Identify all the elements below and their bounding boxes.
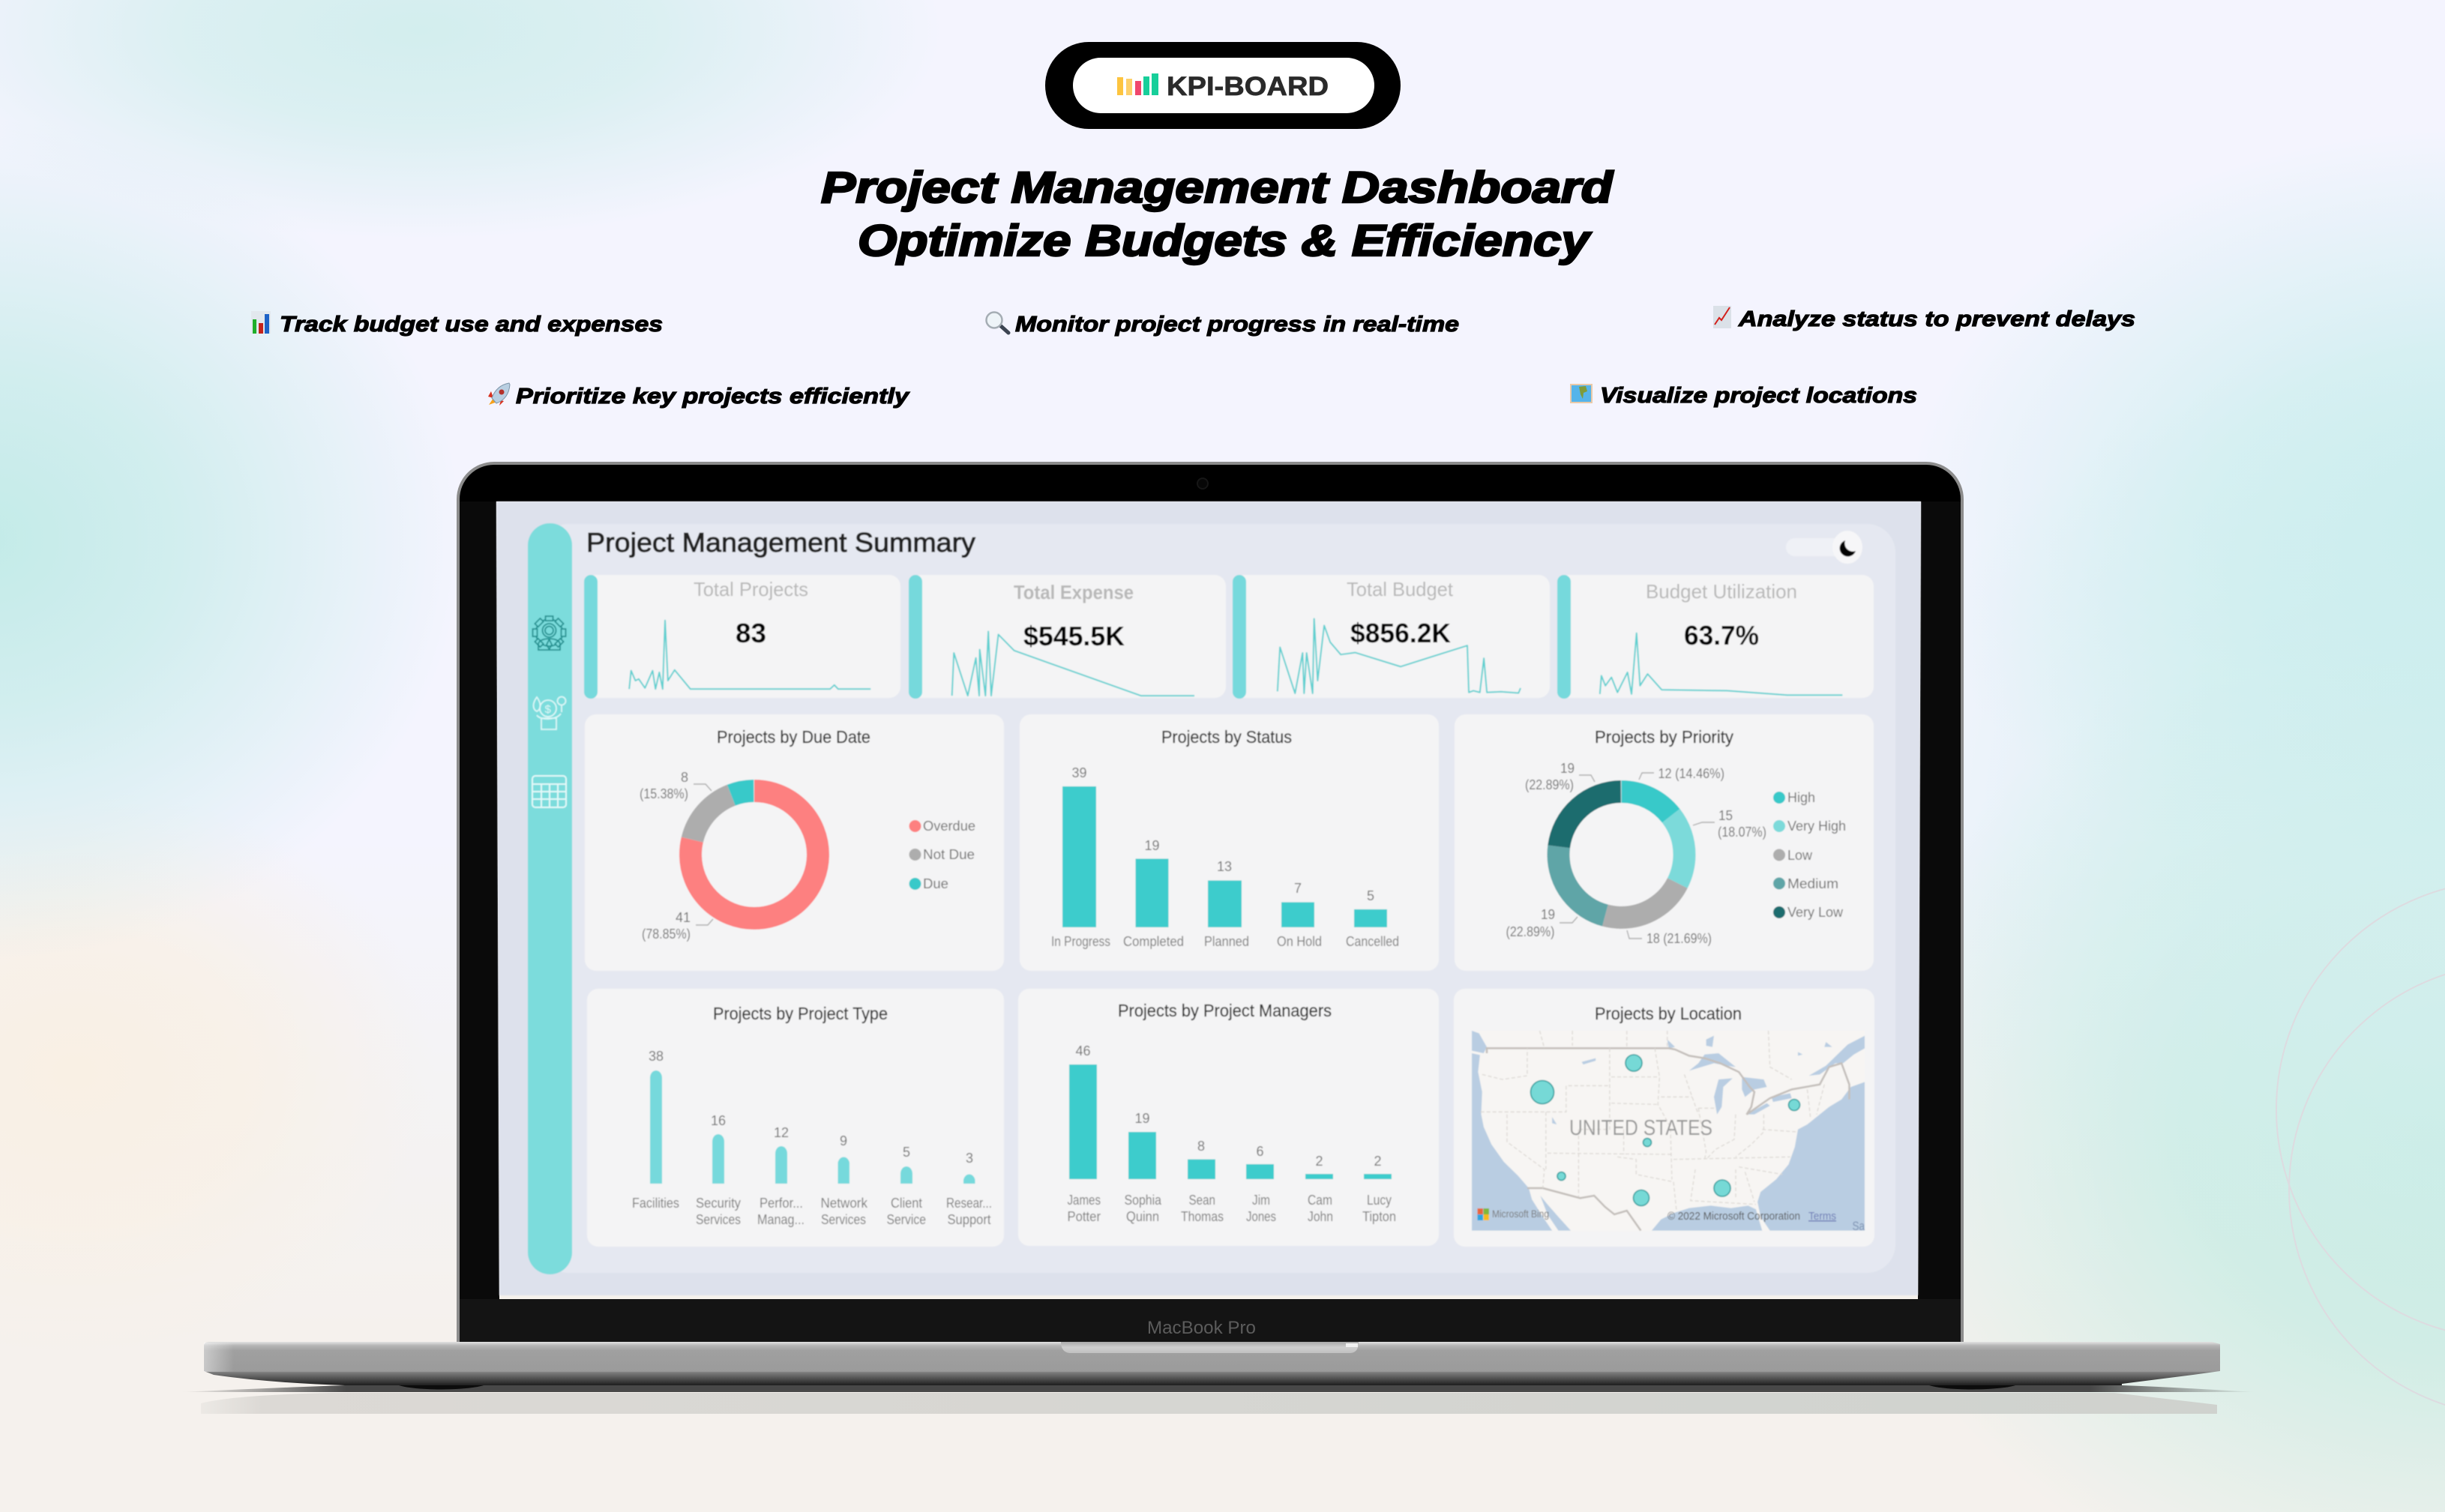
data labels: (22.89%) [1525, 777, 1574, 792]
icon: logo bars [1117, 73, 1158, 95]
category labels: Service [886, 1212, 926, 1227]
category labels: Cam [1308, 1193, 1332, 1208]
KPI card: total expense [909, 575, 1226, 699]
values [649, 1049, 973, 1166]
sparkline [1600, 633, 1842, 695]
heading: Projects by Status [1161, 727, 1292, 747]
panel: projects by status [1020, 714, 1439, 971]
legend: Overdue [923, 819, 975, 834]
feet [395, 1384, 2019, 1390]
legend: Very High [1787, 819, 1846, 834]
data labels [1506, 761, 1766, 946]
values: 38 [649, 1049, 664, 1064]
map attribution: Microsoft Bing [1492, 1208, 1549, 1220]
panel: projects by due date [585, 714, 1004, 971]
category labels: Facilities [632, 1196, 679, 1211]
icon: money tree [534, 697, 565, 729]
panel: projects by project type [587, 989, 1004, 1247]
bar chart [650, 1070, 975, 1184]
legend: High [1787, 790, 1815, 805]
icon: bar chart emoji [251, 311, 271, 334]
logo wordmark: KPI-BOARD [1167, 72, 1329, 101]
map label: UNITED STATES [1569, 1116, 1712, 1140]
bar chart [1069, 1064, 1392, 1179]
decorative circle outlines [2276, 881, 2445, 1416]
category labels [1068, 1193, 1396, 1224]
icon: trend chart emoji [1713, 306, 1731, 328]
location bubbles [1531, 1055, 1799, 1205]
map attribution: © 2022 Microsoft Corporation [1667, 1210, 1800, 1223]
values: 12 [774, 1125, 789, 1140]
heading: Projects by Due Date [717, 727, 870, 747]
legend [1773, 790, 1846, 920]
KPI card: total expense: $545.5K [1023, 621, 1125, 651]
category labels: Thomas [1181, 1209, 1224, 1224]
legend: Due [923, 876, 948, 891]
KPI card: total budget [1233, 575, 1550, 699]
values: 13 [1217, 859, 1232, 874]
KPI card: total projects: Total Projects [694, 578, 808, 600]
icon: money tree: $ [544, 703, 552, 716]
category labels: Jim [1252, 1193, 1270, 1208]
values: 5 [1367, 888, 1374, 903]
values: 9 [840, 1133, 847, 1148]
bullet: track budget: Track budget use and expenses [280, 313, 663, 337]
sparkline [952, 631, 1194, 696]
dashboard inner panel [540, 524, 1895, 1273]
panel: projects by location [1454, 989, 1874, 1247]
values: 5 [903, 1145, 910, 1160]
category labels: Security [696, 1196, 741, 1211]
category labels: Cancelled [1346, 934, 1399, 949]
map geography [1472, 1031, 1865, 1231]
badge: KPI-BOARD logo [1045, 42, 1401, 129]
category labels: Sophia [1125, 1193, 1162, 1208]
data labels: 19 [1541, 907, 1555, 922]
reflection under laptop [201, 1393, 2217, 1414]
legend: Medium [1787, 876, 1838, 891]
camera [1197, 478, 1208, 489]
map [1472, 1031, 1865, 1233]
data labels: (15.38%) [640, 786, 688, 801]
category labels: Manag... [757, 1212, 805, 1227]
values: 2 [1374, 1154, 1382, 1169]
category labels: Client [891, 1196, 922, 1211]
values: 19 [1144, 838, 1160, 853]
KPI card: total budget: $856.2K [1350, 618, 1451, 648]
category labels [1051, 934, 1399, 949]
icon: moon [1840, 540, 1856, 556]
legend: Very Low [1787, 905, 1844, 920]
values: 46 [1075, 1043, 1091, 1058]
donut chart [691, 791, 818, 918]
category labels: Perfor... [760, 1196, 803, 1211]
heading: Projects by Project Managers [1118, 1001, 1332, 1020]
panel: projects by priority [1455, 714, 1874, 971]
data labels [640, 770, 713, 942]
category labels: Tipton [1362, 1209, 1396, 1224]
values: 39 [1071, 765, 1087, 780]
data labels: (18.07%) [1718, 825, 1766, 840]
icon: magnifier emoji [987, 312, 1008, 333]
legend [909, 819, 975, 891]
KPI card: budget utilization: 63.7% [1684, 620, 1759, 651]
map attribution: Terms [1808, 1210, 1836, 1223]
donut chart [1558, 792, 1684, 918]
category labels: In Progress [1051, 934, 1110, 949]
bullet: visualize locations: Visualize project locations [1600, 384, 1917, 408]
data labels: 41 [676, 910, 691, 925]
category labels: John [1308, 1209, 1333, 1224]
icon: rocket emoji [488, 383, 510, 406]
panel: projects by project managers [1018, 989, 1439, 1246]
values: 16 [711, 1113, 726, 1128]
category labels: Sean [1189, 1193, 1215, 1208]
brand label: MacBook Pro [1147, 1318, 1256, 1338]
data labels: 8 [681, 770, 688, 785]
data labels: 19 [1560, 761, 1575, 776]
values: 3 [966, 1151, 973, 1166]
laptop [180, 462, 2257, 1414]
legend: Not Due [923, 847, 975, 862]
map attribution [1477, 1208, 1865, 1231]
legend: Low [1787, 848, 1813, 863]
values [1075, 1043, 1382, 1169]
map attribution: Sa [1852, 1219, 1865, 1233]
values: 7 [1294, 881, 1302, 896]
values: 19 [1134, 1111, 1150, 1126]
base [204, 1342, 2220, 1385]
category labels: Network [820, 1196, 868, 1211]
data labels: (22.89%) [1506, 924, 1555, 939]
dashboard title: Project Management Summary [586, 527, 975, 558]
category labels: Potter [1068, 1209, 1101, 1224]
icon: table [532, 776, 566, 807]
category labels [632, 1196, 992, 1227]
heading: Projects by Priority [1595, 727, 1733, 747]
category labels: Support [948, 1212, 991, 1227]
dashboard screen [496, 502, 1921, 1295]
values: 2 [1315, 1154, 1323, 1169]
category labels: Jones [1246, 1209, 1276, 1224]
title: Optimize Budgets & Efficiency [858, 217, 1592, 265]
bullet: prioritize projects: Prioritize key projects efficiently [516, 385, 910, 409]
KPI card: budget utilization [1557, 575, 1874, 699]
category labels: Services [821, 1212, 866, 1227]
values [1071, 765, 1374, 903]
heading: Projects by Project Type [713, 1004, 888, 1023]
category labels: On Hold [1277, 934, 1322, 949]
KPI card: total expense: Total Expense [1014, 581, 1134, 603]
category labels: James [1068, 1193, 1101, 1208]
category labels: Planned [1204, 934, 1249, 949]
category labels: Completed [1123, 934, 1184, 949]
data labels: (78.85%) [642, 927, 691, 942]
sparkline [1278, 618, 1521, 693]
data labels: 15 [1718, 808, 1733, 823]
data labels: 18 (21.69%) [1646, 931, 1712, 946]
dashboard background [496, 502, 1921, 1295]
heading: Projects by Location [1595, 1004, 1742, 1023]
values: 6 [1256, 1144, 1264, 1159]
KPI card: budget utilization: Budget Utilization [1646, 580, 1797, 603]
lid [457, 462, 1964, 1342]
dark mode toggle [1786, 531, 1862, 564]
KPI card: total budget: Total Budget [1347, 578, 1454, 600]
category labels: Resear... [946, 1196, 992, 1211]
bullet: monitor progress: Monitor project progress in real-time [1015, 313, 1459, 337]
shadow under laptop [180, 1385, 2257, 1392]
base notch [1061, 1342, 1359, 1353]
sidebar [528, 523, 572, 1274]
values: 8 [1197, 1139, 1205, 1154]
KPI card: total projects: 83 [736, 618, 766, 648]
data labels: 12 (14.46%) [1658, 766, 1724, 781]
category labels: Lucy [1367, 1193, 1392, 1208]
title [821, 163, 1614, 265]
bar chart [1062, 786, 1387, 927]
category labels: Services [696, 1212, 741, 1227]
title: Project Management Dashboard [821, 163, 1614, 212]
bullet: analyze status: Analyze status to prevent delays [1738, 307, 2135, 331]
screen glass [496, 502, 1921, 1299]
icon: gear with person [532, 616, 565, 650]
sparkline [629, 621, 870, 689]
KPI card: total projects [584, 575, 900, 699]
icon: map emoji [1570, 384, 1593, 403]
category labels: Quinn [1126, 1209, 1159, 1224]
